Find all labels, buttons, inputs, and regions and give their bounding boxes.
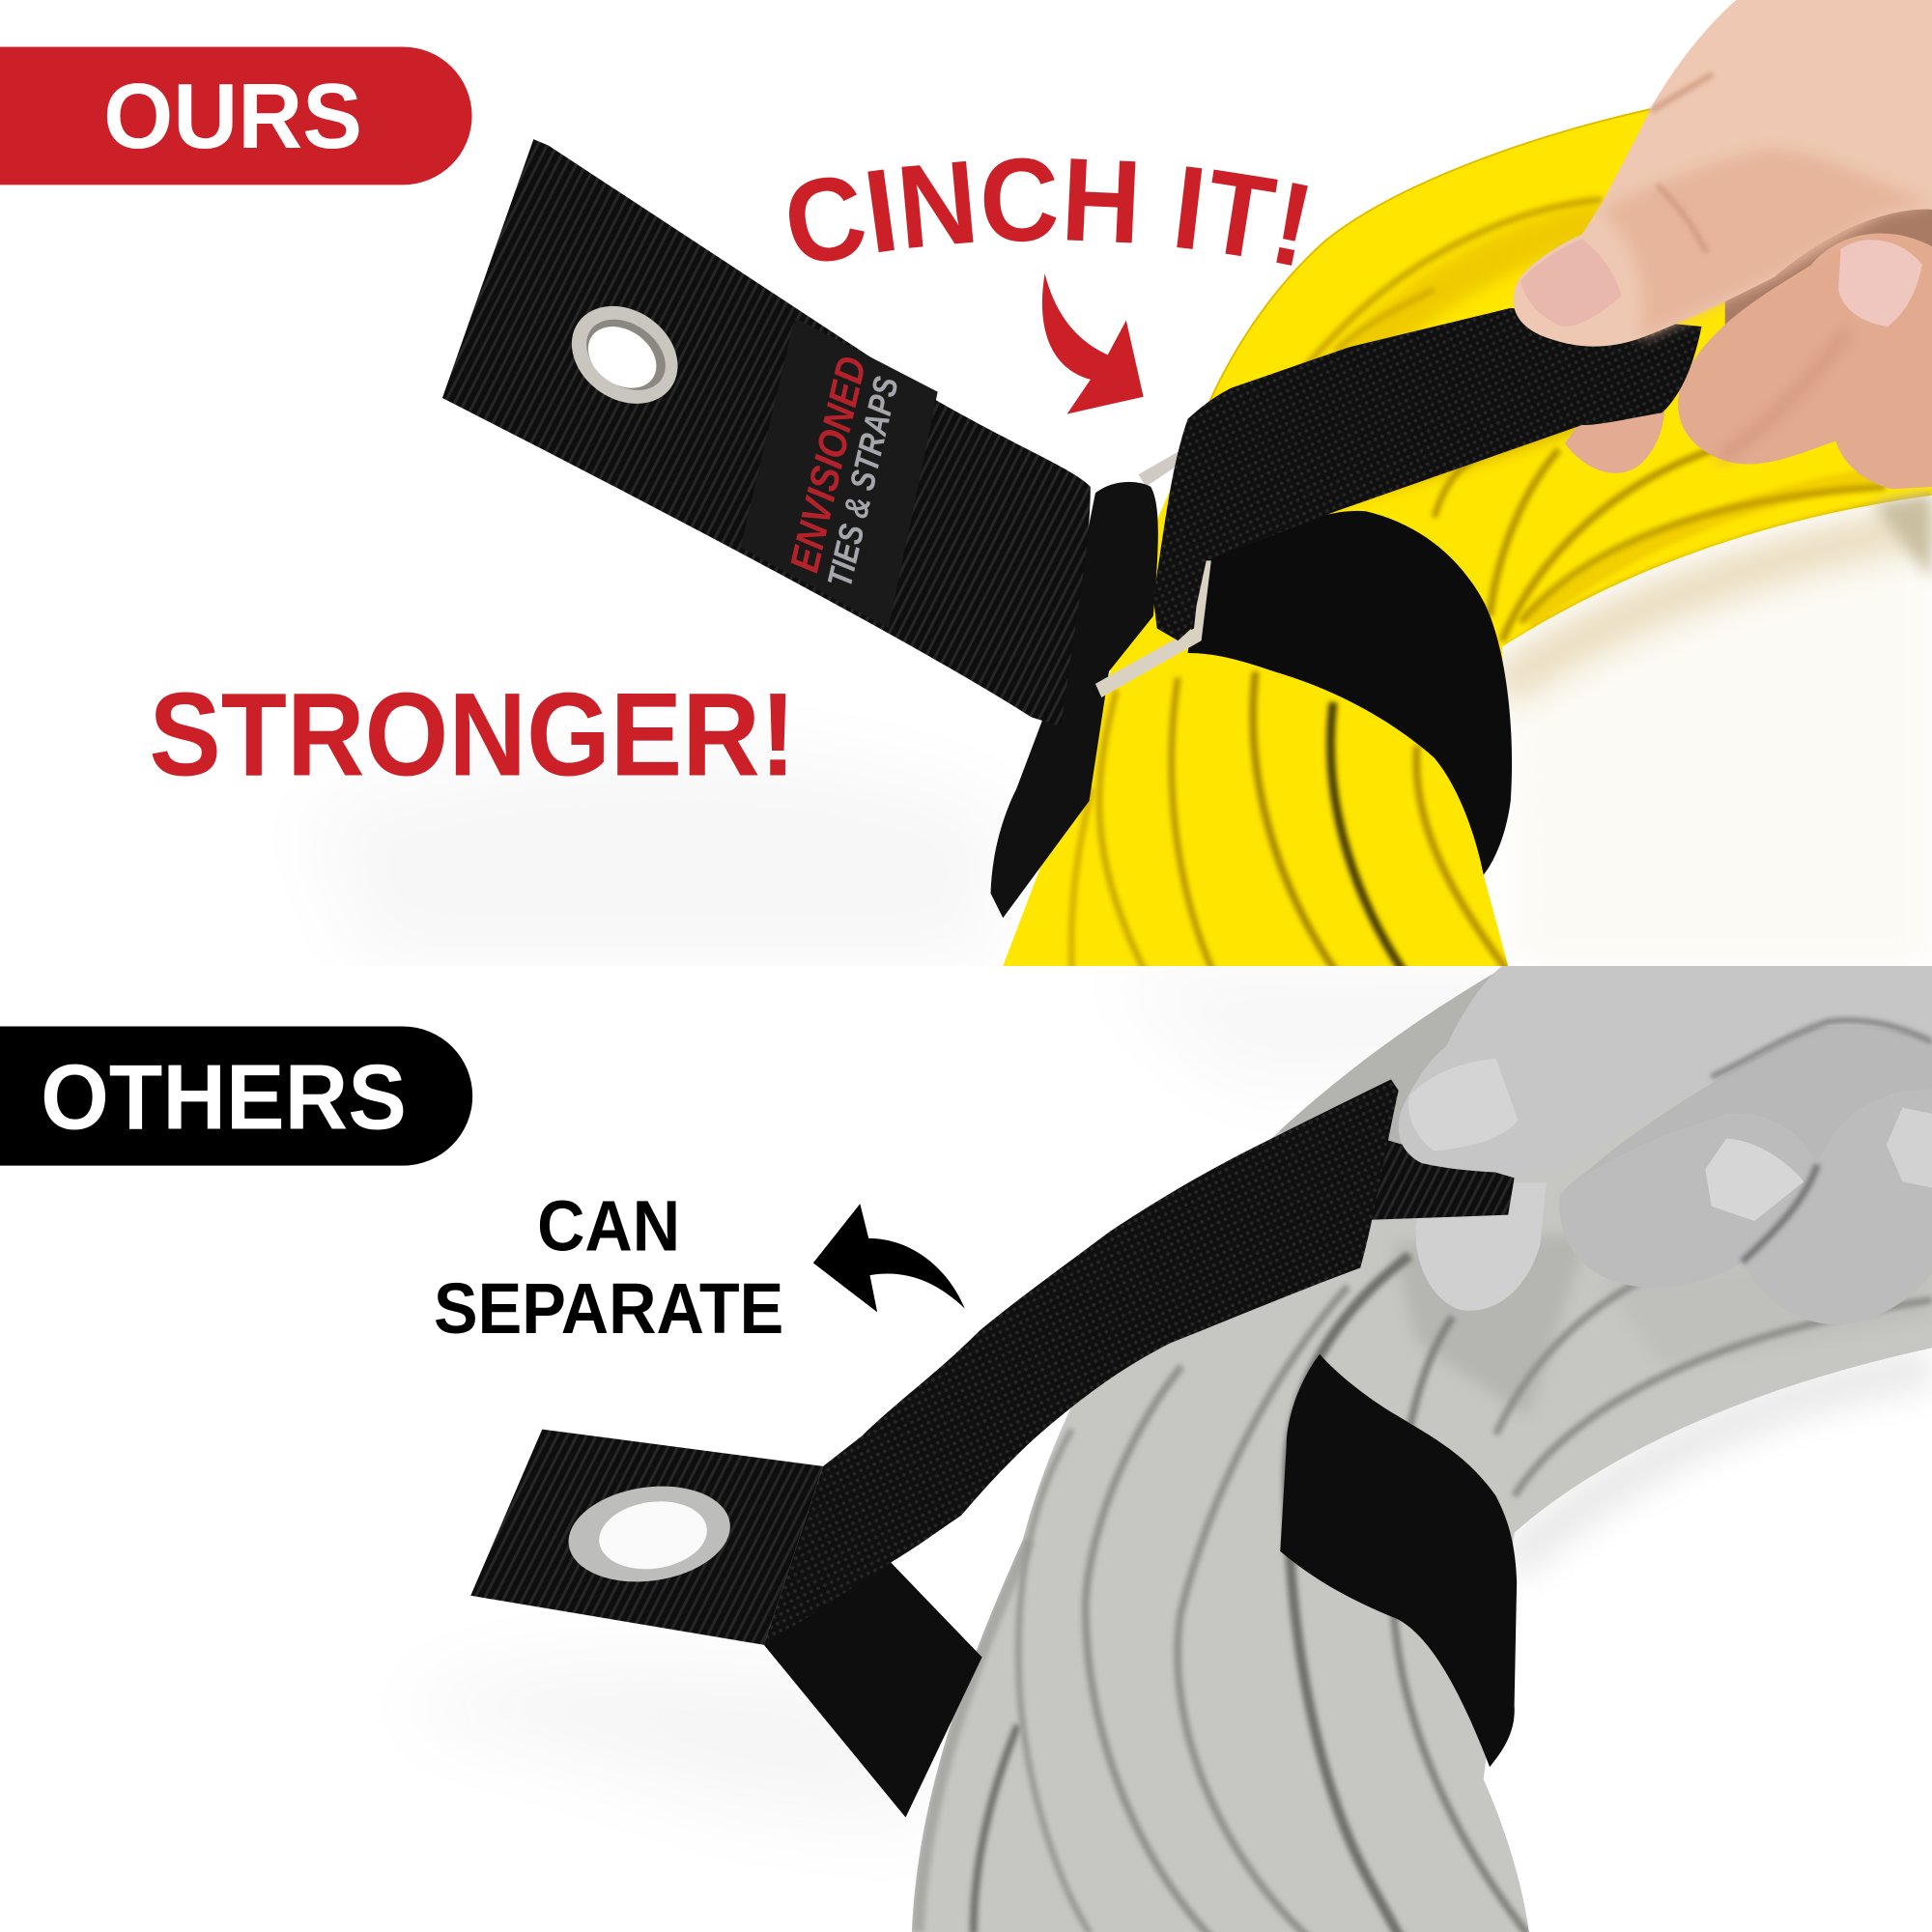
badge: ours: [0, 46, 472, 185]
strap: others: [470, 1079, 1515, 1817]
fingernail: [1705, 1139, 1804, 1221]
buckle: upper metal: [1138, 452, 1179, 485]
headline: cinch it: [789, 158, 1308, 266]
shading: [1325, 204, 1600, 355]
separators: right: [1435, 456, 1479, 518]
velcro patch on coil: [1280, 1354, 1517, 1767]
strap tail below: [764, 1559, 982, 1817]
grommet: [562, 1476, 736, 1592]
separators: top: [1300, 194, 1604, 363]
badge label: OURS: [103, 65, 362, 168]
cord plug blur: [1873, 493, 1932, 579]
separators: [1018, 1430, 1091, 1932]
grey cable coil: [912, 972, 1932, 1932]
arrow: red curved pointing to strap: [1042, 273, 1144, 414]
headline: cinch it: CINCH IT!: [789, 158, 1308, 266]
velcro fold and lower tail: [991, 482, 1158, 918]
callout: can separate: [434, 1186, 783, 1349]
yellow cable coil: [1003, 108, 1932, 974]
strap: pulled end: [1153, 308, 1701, 640]
narrow end tab: [1370, 1140, 1515, 1220]
headline: stronger: STRONGER!: [149, 668, 796, 800]
long strap body: [764, 1079, 1399, 1645]
separators: bottom: [1071, 788, 1092, 974]
hand: fingers holding strap: [1416, 1090, 1932, 1324]
brand text: ENVISIONED: [781, 353, 875, 576]
panel: others photo: [394, 966, 1932, 1932]
strap: ours, with grommet and label: [442, 139, 1091, 727]
velcro band around coil: [1188, 511, 1512, 875]
surface shadow under strap: [308, 749, 1010, 966]
fingernail: [1887, 1108, 1932, 1188]
callout: can separate: SEPARATE: [434, 1268, 783, 1349]
buckle: lower metal: [1095, 560, 1211, 697]
badge label: OTHERS: [41, 1045, 407, 1149]
outer strand: [918, 1540, 1029, 1932]
top disc shading: [1279, 973, 1494, 1145]
label patch: [741, 318, 938, 629]
badge: others: [0, 1026, 472, 1166]
grommet: [572, 305, 678, 404]
hand: thumb and palm: [1399, 966, 1932, 1195]
hand: palm and thumb: [1514, 0, 1932, 347]
coil interior shadow: [1522, 564, 1920, 954]
grommet tab: [470, 1430, 823, 1645]
sub-brand text: TIES & STRAPS: [820, 373, 906, 590]
arrow: black curved pointing left: [813, 1204, 965, 1312]
panel: ours photo: [308, 0, 1932, 974]
shading between hand and coil: [1392, 1233, 1589, 1417]
thumbnail: [1408, 1059, 1518, 1151]
callout: can separate: CAN: [537, 1186, 680, 1266]
surface shadows: [625, 1706, 842, 1773]
hand: under finger and middle finger: [1565, 209, 1932, 489]
